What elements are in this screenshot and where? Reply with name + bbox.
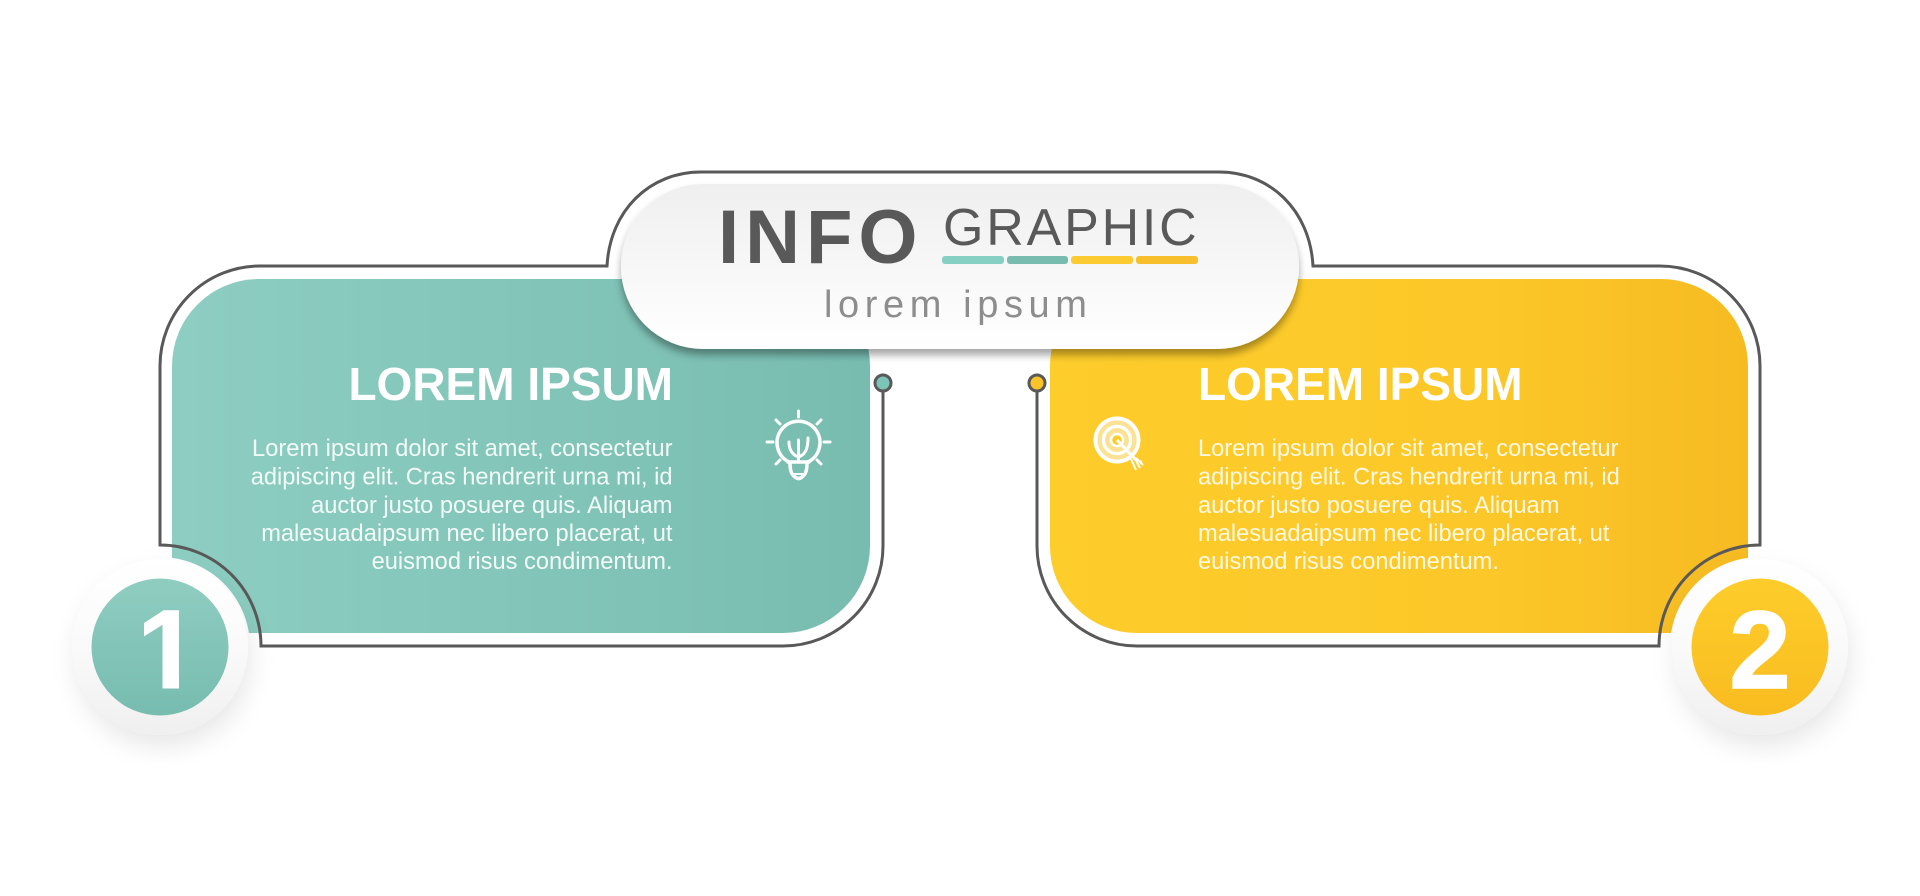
body text: yellow card: Lorem ipsum dolor sit amet, consectetur — [1198, 436, 1619, 462]
connector dot teal — [875, 375, 891, 391]
number badge 1 — [92, 578, 228, 716]
heading: yellow card: LOREM IPSUM — [1198, 358, 1523, 410]
connector dot yellow — [1029, 375, 1045, 391]
body text: yellow card: adipiscing elit. Cras hendrerit urna mi, id — [1198, 464, 1620, 490]
number badge 1: 1 — [137, 587, 199, 712]
body text: yellow card: auctor justo posuere quis. Aliquam — [1198, 493, 1559, 519]
body text: teal card: malesuadaipsum nec libero placerat, ut — [261, 521, 673, 547]
title underline bars — [942, 256, 1198, 264]
title pill — [621, 184, 1299, 349]
body text: teal card: auctor justo posuere quis. Aliquam — [311, 493, 672, 519]
body text: teal card: Lorem ipsum dolor sit amet, consectetur — [252, 436, 673, 462]
icon: target with arrow — [1096, 418, 1143, 470]
badge 2 white ring — [1670, 557, 1850, 737]
title: INFO: INFO — [718, 195, 924, 280]
body text: yellow card: malesuadaipsum nec libero placerat, ut — [1198, 521, 1610, 547]
panel: teal card — [172, 279, 870, 633]
number badge 2 — [1692, 578, 1828, 716]
outline frame — [160, 172, 1760, 646]
title: GRAPHIC: GRAPHIC — [943, 199, 1200, 257]
body text: yellow card: euismod risus condimentum. — [1198, 549, 1499, 575]
number badge 2: 2 — [1729, 589, 1791, 712]
panel: yellow card — [1050, 279, 1748, 633]
heading: teal card: LOREM IPSUM — [348, 358, 673, 410]
badge 1 white ring — [70, 557, 250, 737]
body text: teal card: euismod risus condimentum. — [372, 549, 672, 575]
subtitle: lorem ipsum — [824, 284, 1093, 326]
icon: light bulb — [767, 411, 830, 478]
body text: teal card: adipiscing elit. Cras hendrerit urna mi, id — [251, 464, 672, 490]
